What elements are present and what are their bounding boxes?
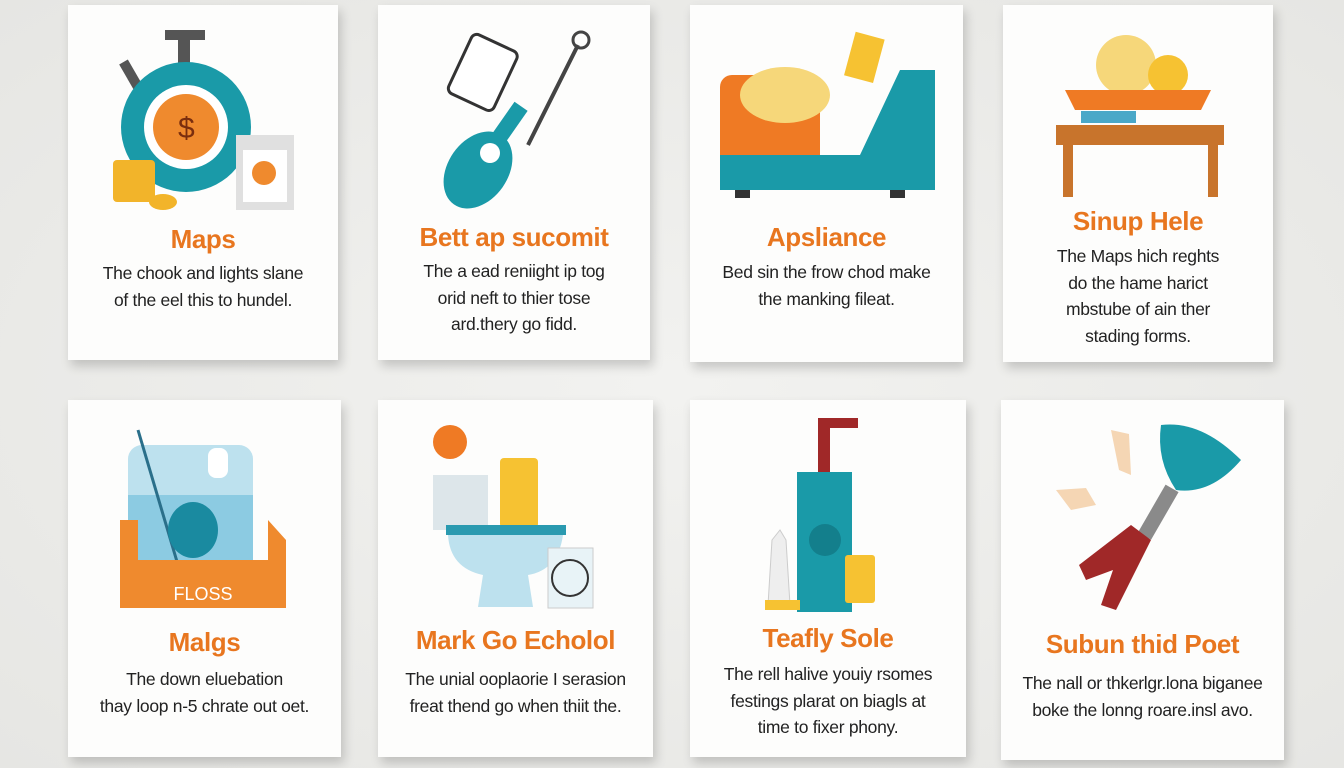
title: Apsliance [767, 222, 886, 252]
text [1022, 673, 1263, 720]
icon: floss jug in tray: FLOSS [173, 584, 233, 604]
card 5 [68, 400, 341, 757]
text: of the eel this to hundel. [114, 290, 292, 310]
icon: pot with coin [113, 30, 294, 210]
text: festings plarat on biagls at [731, 690, 925, 710]
title: Teafly Sole [763, 623, 893, 653]
icon: tall machine [765, 418, 875, 612]
text: the manking fileat. [758, 288, 895, 308]
text: orid neft to thier tose [438, 288, 590, 308]
icon: table with bowl [1056, 35, 1224, 197]
text [405, 669, 626, 716]
icon: appliance [720, 32, 935, 198]
card 1: Maps [68, 5, 338, 360]
title: Bett ap sucomit [419, 222, 609, 252]
text: mbstube of ain ther [1066, 299, 1210, 319]
text: The rell halive youiy rsomes [724, 664, 932, 684]
title: Sinup Hele [1073, 206, 1203, 236]
card 7 [690, 400, 966, 757]
text: freat thend go when thiit the. [410, 696, 621, 716]
icon: handheld device [444, 30, 590, 208]
text: The chook and lights slane [103, 263, 303, 283]
text [103, 263, 303, 310]
text: Bed sin the frow chod make [722, 262, 931, 282]
card 8 [1001, 400, 1284, 760]
text: stading forms. [1085, 326, 1191, 346]
text: The Maps hich reghts [1057, 246, 1219, 266]
text [722, 262, 931, 308]
icon: pot with coin: $ [178, 112, 195, 145]
title: Maps [171, 224, 235, 254]
text: The down eluebation [126, 669, 283, 689]
text: time to fixer phony. [758, 717, 898, 737]
icon: scraper tool [1056, 424, 1241, 610]
text: do the hame harict [1068, 272, 1208, 292]
text: The a ead reniight ip tog [423, 261, 605, 281]
card 6 [378, 400, 653, 757]
text [1057, 246, 1219, 346]
text: The nall or thkerlgr.lona biganee [1022, 673, 1263, 693]
text [100, 669, 309, 716]
text [724, 664, 932, 737]
card 2 [378, 5, 650, 360]
title: Subun thid Poet [1046, 629, 1239, 659]
card 4 [1003, 5, 1273, 362]
icon: floss jug in tray [120, 430, 286, 608]
title: Malgs [169, 627, 240, 657]
title: Mark Go Echolol [416, 625, 615, 655]
text: The unial ooplaorie I serasion [405, 669, 626, 689]
text: ard.thery go fidd. [451, 314, 577, 334]
card 3 [690, 5, 963, 362]
text: boke the lonng roare.insl avo. [1032, 700, 1253, 720]
text: thay loop n-5 chrate out oet. [100, 696, 309, 716]
icon: toilet and pitcher [433, 425, 594, 608]
text [423, 261, 605, 334]
